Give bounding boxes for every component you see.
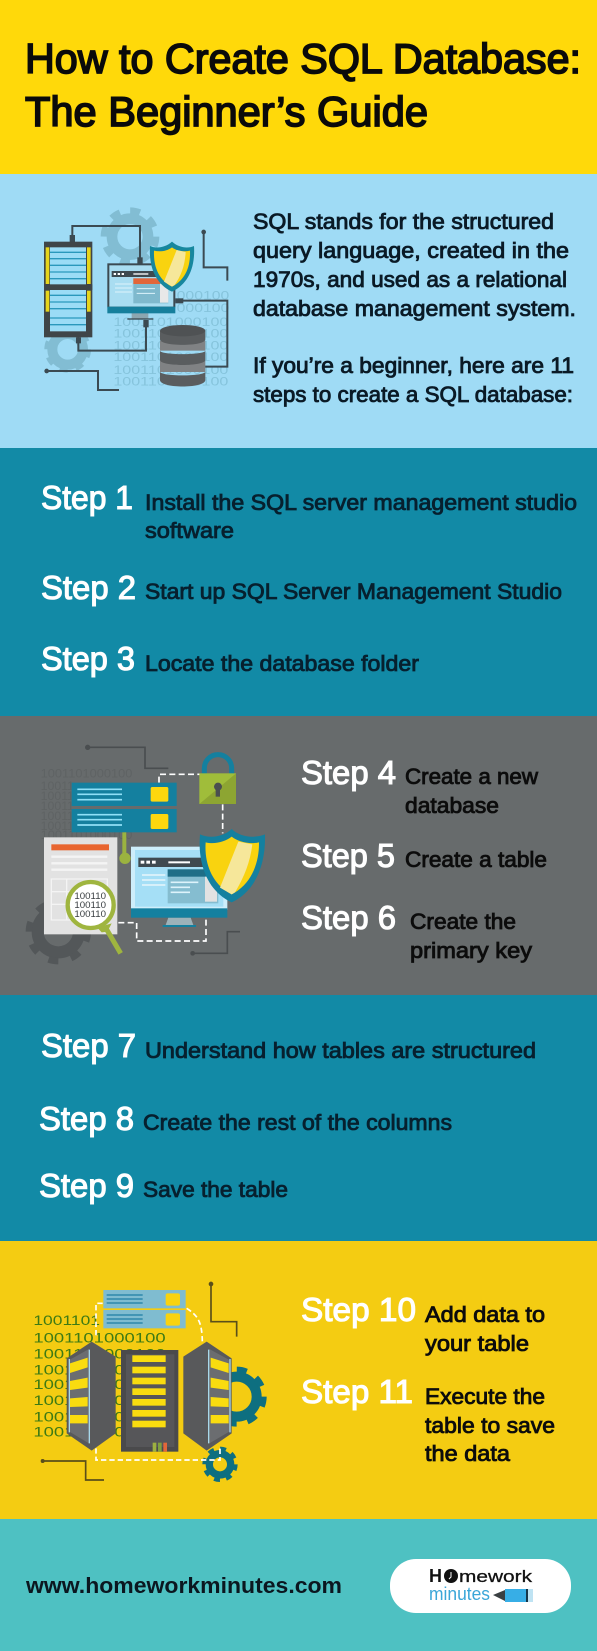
binary digits: [41, 767, 133, 842]
binary digits: 10011: [41, 789, 74, 803]
icon: padlock: [199, 755, 236, 804]
step 2: Step 2: [41, 569, 136, 606]
icon: monitor: [107, 263, 175, 320]
title: How to Create SQL Database:: [25, 35, 581, 82]
step 6: Create the: [410, 909, 516, 934]
intro lead-in: steps to create a SQL database:: [253, 382, 573, 407]
step 10: your table: [425, 1331, 529, 1356]
panel: steps 4 to 6: [0, 716, 597, 995]
icon: security shield: [150, 242, 194, 292]
step 10: Step 10: [301, 1291, 416, 1328]
step 8: Step 8: [39, 1100, 134, 1137]
intro paragraph: query language, created in the: [253, 238, 569, 263]
binary digits: 10011: [41, 799, 74, 813]
icon: pencil: [493, 1589, 533, 1602]
step 4: Create a new: [405, 764, 538, 789]
binary digits: 1001101000100: [33, 1362, 166, 1377]
binary digits: 1001101000100: [113, 327, 229, 341]
binary digits: 1001101000100: [33, 1346, 166, 1361]
binary digits: 10011: [41, 809, 74, 823]
binary digits: 1001101000100: [113, 350, 229, 364]
step 5: Create a table: [405, 847, 547, 872]
step 7: Step 7: [41, 1027, 136, 1064]
binary digits: 1001101000100: [33, 1377, 166, 1392]
step 6: primary key: [410, 938, 532, 963]
website address: www.homeworkminutes.com: [25, 1573, 342, 1598]
logo: Homework Minutes: [390, 1559, 571, 1613]
icon: security shield: [200, 829, 265, 902]
dashed connectors: [96, 1303, 220, 1460]
binary digits: 1001101000100: [33, 1393, 166, 1408]
step 11: Execute the: [425, 1384, 545, 1409]
icon: magnifying glass: [68, 882, 121, 953]
intro paragraph: database management system.: [253, 296, 576, 321]
step 10: [301, 1291, 545, 1356]
intro paragraph: 1970s, and used as a relational: [253, 267, 567, 292]
intro paragraph: SQL stands for the structured: [253, 209, 554, 234]
step 4: Step 4: [301, 754, 396, 791]
panel: steps 10 and 11: [0, 1241, 597, 1519]
step 3: [41, 640, 419, 677]
binary digits: 000100: [177, 288, 230, 302]
title: [25, 35, 581, 135]
step 9: [39, 1167, 288, 1204]
icon: database cylinders: [160, 325, 205, 386]
title: The Beginner’s Guide: [25, 88, 428, 135]
icon: monitor: [131, 847, 227, 927]
step 11: table to save: [425, 1413, 555, 1438]
step 11: the data: [425, 1441, 511, 1466]
binary digits: 1001101000100: [41, 828, 133, 842]
step 3: Locate the database folder: [145, 651, 419, 676]
step 9: Save the table: [143, 1177, 288, 1202]
wires: [43, 1284, 237, 1480]
binary digits: 1001101000100: [113, 375, 229, 389]
binary digits: 1001101000100: [113, 338, 229, 352]
illustration: server, monitor, shield and database: [44, 211, 230, 390]
icon: centre server tower: [121, 1350, 178, 1452]
logo: Homework Minutes: mework: [459, 1567, 533, 1586]
icon: background gears: [47, 211, 156, 370]
binary digits: 10011: [41, 779, 74, 793]
step 1: Step 1: [41, 479, 133, 516]
binary digits: 1001101: [33, 1313, 100, 1328]
binary digits: 1001101000100: [113, 363, 229, 377]
binary digits: 000100: [177, 301, 230, 315]
binary digits: [33, 1313, 166, 1440]
binary digits: 10011: [41, 819, 74, 833]
step 7: Understand how tables are structured: [145, 1038, 536, 1063]
icon: data panels: [103, 1290, 186, 1328]
step 8: Create the rest of the columns: [143, 1110, 452, 1135]
icon: magnifying glass: 100110: [74, 900, 106, 910]
panel: steps 7 to 9: [0, 995, 597, 1241]
intro lead-in: If you’re a beginner, here are 11: [253, 353, 574, 378]
step 11: [301, 1373, 555, 1466]
step 1: software: [145, 518, 234, 543]
binary digits: 1001101000100: [41, 767, 133, 781]
step 1: [41, 479, 577, 543]
icon: left server tower: [67, 1342, 116, 1451]
panel: footer: [0, 1519, 597, 1651]
step 1: Install the SQL server management studio: [145, 490, 577, 515]
green connector: [119, 832, 131, 864]
wires: [47, 226, 227, 390]
binary digits: [113, 288, 230, 389]
step 5: [301, 837, 547, 874]
binary digits: 1001101000100: [33, 1425, 166, 1440]
icon: magnifying glass: 100110: [74, 891, 106, 901]
step 6: [301, 899, 532, 963]
step 9: Step 9: [39, 1167, 134, 1204]
step 4: database: [405, 793, 499, 818]
illustration: server towers with binary digits: [33, 1282, 263, 1480]
step 10: Add data to: [425, 1302, 545, 1327]
step 4: [301, 754, 538, 818]
panel: introduction: [0, 174, 597, 448]
step 8: [39, 1100, 452, 1137]
icon: document: [44, 837, 117, 934]
icon: right server tower: [183, 1342, 232, 1451]
step 5: Step 5: [301, 837, 395, 874]
dashed connectors: [118, 774, 223, 941]
icon: data panels: [72, 783, 177, 832]
step 3: Step 3: [41, 640, 135, 677]
panel: title banner: [0, 0, 597, 174]
logo: Homework Minutes: H: [429, 1566, 442, 1586]
icon: server rack: [44, 242, 92, 337]
icon: background gear: [29, 902, 88, 961]
step 2: Start up SQL Server Management Studio: [145, 579, 562, 604]
intro lead-in: [253, 353, 574, 407]
illustration: data panels, lock, document and monitor: [29, 745, 265, 961]
binary digits: 1001101000100: [113, 315, 229, 329]
binary digits: 1001101000100: [33, 1410, 166, 1425]
step 7: [41, 1027, 536, 1064]
logo: Homework Minutes: minutes: [429, 1584, 490, 1604]
panel: steps 1 to 3: [0, 448, 597, 716]
wires: [88, 747, 240, 953]
binary digits: 1001101000100: [33, 1330, 166, 1345]
step 2: [41, 569, 562, 606]
step 6: Step 6: [301, 899, 396, 936]
icon: magnifying glass: 100110: [74, 909, 106, 919]
icon: teal gears: [204, 1370, 263, 1480]
step 11: Step 11: [301, 1373, 413, 1410]
intro paragraph: [253, 209, 576, 321]
